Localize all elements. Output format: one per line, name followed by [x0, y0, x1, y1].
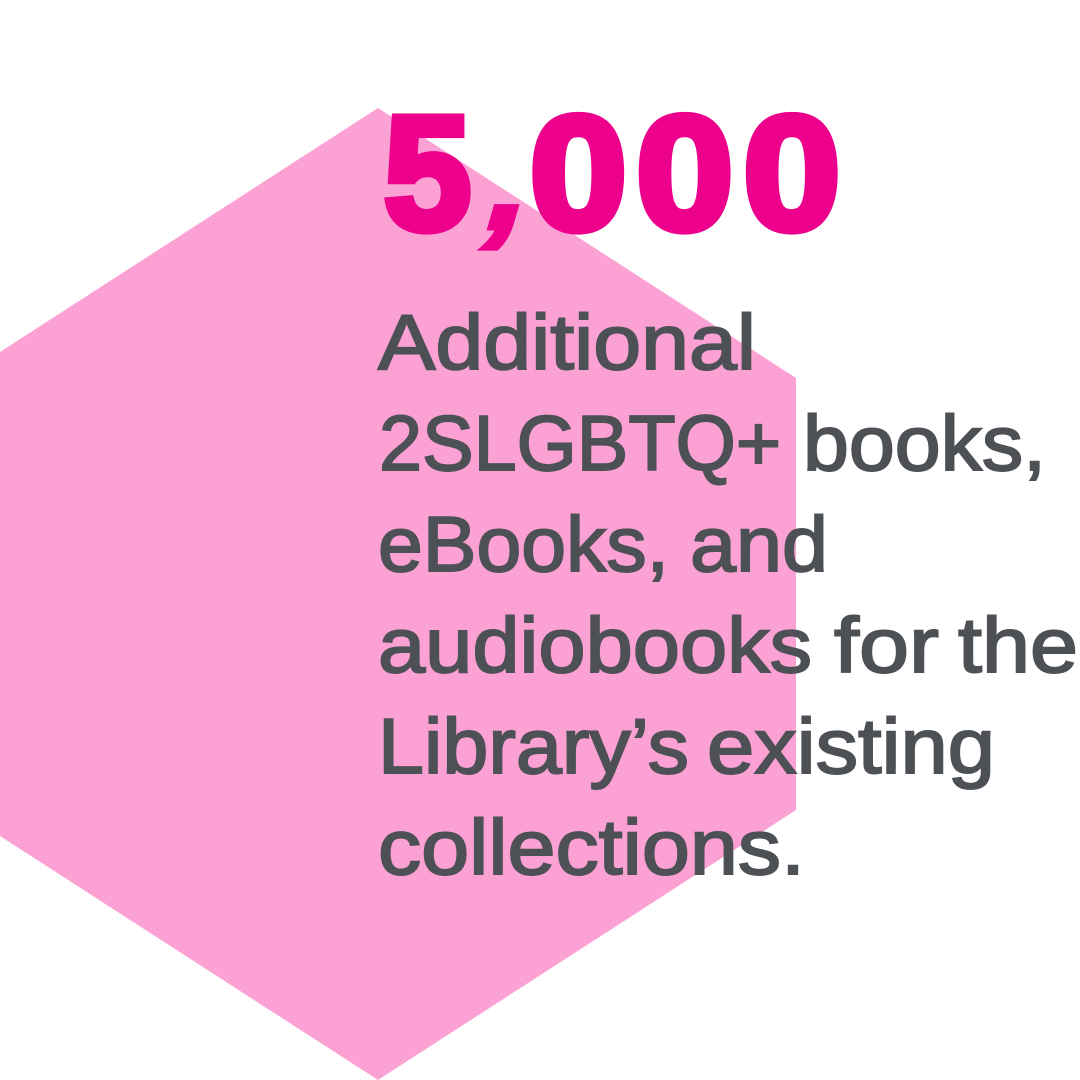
headline number — [384, 82, 841, 264]
description text block: books, — [803, 399, 1046, 487]
description text block: 2SLGBTQ+ — [379, 399, 781, 487]
pink hexagon background — [0, 108, 796, 1080]
description text block: Additional — [378, 298, 756, 386]
headline number: 000 — [530, 82, 841, 264]
headline number: , — [474, 110, 552, 255]
description text block: and — [690, 500, 828, 588]
description text block — [378, 298, 1078, 891]
description text block: audiobooks — [378, 601, 812, 689]
description text block: collections. — [378, 803, 805, 891]
description text block: existing — [707, 702, 995, 790]
headline number: 5 — [384, 83, 471, 264]
description text block: eBooks, — [378, 500, 669, 588]
description text block: the — [958, 601, 1078, 689]
description text block: Library’s — [378, 702, 689, 790]
description text block: for — [834, 601, 939, 689]
